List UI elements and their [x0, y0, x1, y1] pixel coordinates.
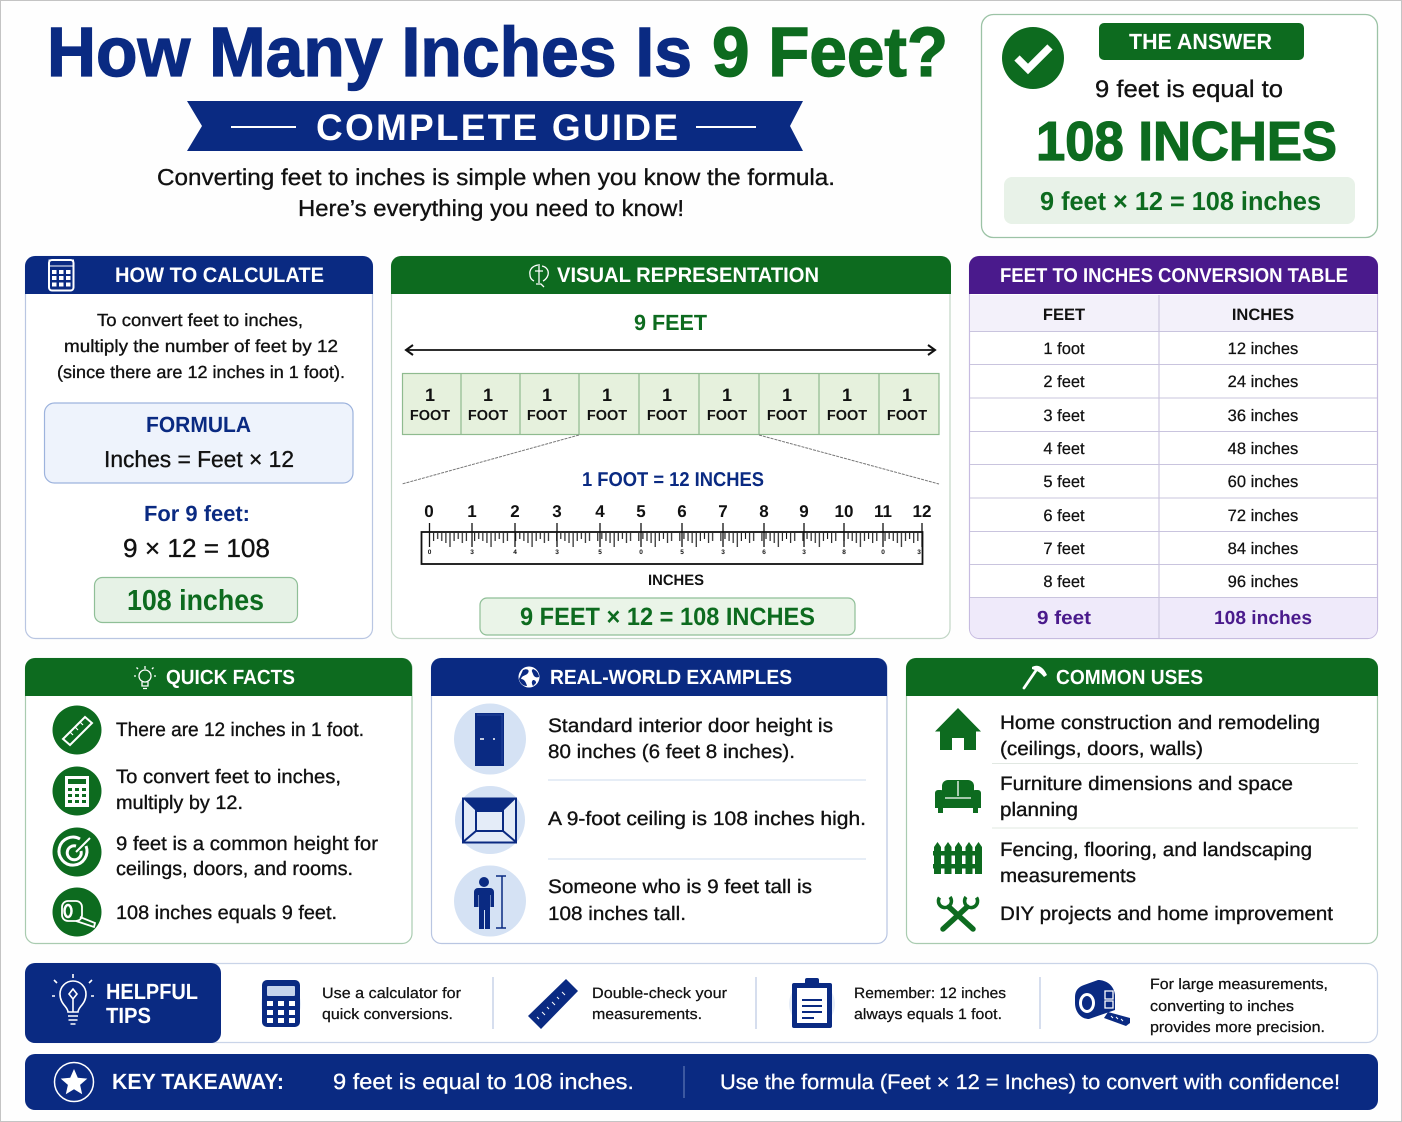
table column headings: INCHES [1232, 306, 1294, 324]
header: how to calculate [25, 256, 373, 294]
explanation text: (since there are 12 inches in 1 foot). [57, 362, 345, 382]
table rows: 8 feet [1043, 573, 1085, 591]
use: fencing: Fencing, flooring, and landscaping [1000, 839, 1312, 861]
fact: 108 inches: 108 inches equals 9 feet. [116, 902, 337, 924]
panel: common uses [906, 658, 1378, 944]
label: 1 foot = 12 inches: 1 FOOT = 12 INCHES [582, 469, 764, 491]
formula box: Inches = Feet × 12 [104, 446, 294, 472]
header: real-world examples: REAL-WORLD EXAMPLES [550, 666, 792, 689]
label: inches: INCHES [648, 572, 704, 589]
foot blocks: 1 [902, 385, 912, 405]
ruler: 0 [881, 549, 885, 556]
table rows: 7 feet [1043, 540, 1085, 558]
foot blocks: FOOT [468, 408, 508, 424]
icon: globe pin [530, 264, 548, 287]
ruler: 0 [428, 549, 432, 556]
header: conversion table [969, 256, 1378, 294]
header: quick facts [25, 658, 412, 696]
ruler: 3 [470, 549, 474, 556]
panel: the answer [982, 14, 1378, 238]
tip: calculator: Use a calculator for [322, 985, 461, 1002]
foot blocks: 1 [425, 385, 435, 405]
fact: 108 inches [52, 888, 337, 936]
table rows: 12 inches [1228, 340, 1298, 358]
tip: tape measure: For large measurements, [1150, 976, 1328, 993]
foot blocks: FOOT [827, 408, 867, 424]
result box [94, 578, 298, 622]
use: fencing [933, 839, 1312, 887]
fact: multiply by 12: To convert feet to inches, [116, 766, 341, 788]
example: door [454, 704, 833, 774]
ruler: 2 [510, 502, 520, 521]
highlighted row: 9 feet: 108 inches [1214, 608, 1312, 629]
banner: complete guide: COMPLETE GUIDE [316, 107, 678, 148]
foot blocks: FOOT [527, 408, 567, 424]
ruler: 5 [598, 549, 602, 556]
answer label [1099, 23, 1304, 60]
foot blocks: FOOT [587, 408, 627, 424]
worked example [123, 501, 270, 563]
table rows: 72 inches [1228, 507, 1298, 525]
ruler: 0 [424, 502, 434, 521]
foot blocks: 1 [842, 385, 852, 405]
icon: globe [518, 666, 540, 688]
ruler: 9 [799, 502, 809, 521]
ruler: 11 [874, 502, 892, 521]
foot blocks: FOOT [767, 408, 807, 424]
example: person: 108 inches tall. [548, 903, 686, 925]
answer lead-in: 9 feet is equal to [1095, 76, 1283, 103]
ruler: 4 [595, 502, 605, 521]
use: furniture: planning [1000, 799, 1078, 821]
table rows: 24 inches [1228, 373, 1298, 391]
fact: 12 inches in a foot [52, 706, 364, 754]
ruler: 5 [636, 502, 646, 521]
use: DIY tools: DIY projects and home improvement [1000, 903, 1334, 925]
fact: multiply by 12 [52, 766, 341, 816]
formula box: FORMULA [146, 412, 251, 437]
use: furniture: Furniture dimensions and space [1000, 773, 1293, 795]
table rows: 2 feet [1043, 373, 1085, 391]
icon: light bulb [134, 666, 156, 688]
tip: tape measure [1075, 976, 1328, 1036]
table rows: 4 feet [1043, 440, 1085, 458]
ruler: 8 [842, 549, 846, 556]
ruler: 12 [913, 502, 931, 521]
tip: ruler: Double-check your [592, 985, 727, 1002]
ruler: 3 [721, 549, 725, 556]
tip: clipboard: always equals 1 foot. [854, 1006, 1002, 1023]
explanation text [57, 310, 345, 382]
use: construction: Home construction and remodeling [1000, 712, 1320, 734]
use: furniture [935, 773, 1293, 821]
key takeaway bar [25, 1054, 1378, 1110]
tip: clipboard: Remember: 12 inches [854, 985, 1006, 1002]
ruler: 3 [917, 549, 921, 556]
worked example: 9 × 12 = 108 [123, 533, 270, 563]
tip: tape measure: converting to inches [1150, 998, 1294, 1015]
ruler: 8 [759, 502, 769, 521]
ruler: 6 [762, 549, 766, 556]
tip: ruler: measurements. [592, 1006, 702, 1023]
table rows: 36 inches [1228, 407, 1298, 425]
intro text: Here’s everything you need to know! [298, 195, 684, 221]
highlighted row: 9 feet: 9 feet [1037, 608, 1092, 629]
ruler: 1 [467, 502, 477, 521]
table rows: 84 inches [1228, 540, 1298, 558]
table rows: 1 foot [1043, 340, 1085, 358]
highlighted row: 9 feet [970, 598, 1377, 638]
intro text: Converting feet to inches is simple when you know the formula. [157, 164, 835, 190]
fact: 12 inches in a foot: There are 12 inches in 1 foot. [116, 719, 364, 741]
ruler: 6 [677, 502, 687, 521]
example: person [454, 866, 812, 936]
header: quick facts: QUICK FACTS [166, 666, 295, 689]
banner: complete guide [187, 101, 803, 151]
label: 9 feet: 9 FEET [634, 310, 708, 335]
result box: 9 FEET × 12 = 108 INCHES [520, 603, 815, 631]
ruler: 3 [552, 502, 562, 521]
tip: ruler [528, 979, 727, 1029]
icon: check mark [1002, 27, 1064, 89]
table column headings: FEET [1043, 306, 1085, 324]
table rows: 5 feet [1043, 473, 1085, 491]
title: 9 Feet? [712, 13, 948, 91]
use: fencing: measurements [1000, 865, 1136, 887]
icon: calculator [49, 260, 74, 290]
fact: common height [52, 828, 379, 880]
arrow: nine feet span [406, 345, 935, 355]
tip: calculator [261, 980, 461, 1027]
table rows: 60 inches [1228, 473, 1298, 491]
example: door: 80 inches (6 feet 8 inches). [548, 741, 795, 763]
panel: real-world examples [431, 658, 887, 944]
ruler: 3 [555, 549, 559, 556]
panel: visual representation [391, 256, 951, 638]
header: conversion table: FEET TO INCHES CONVERSION TABLE [1000, 265, 1348, 287]
title: How Many Inches Is [47, 13, 692, 91]
header: common uses: COMMON USES [1056, 666, 1203, 689]
key takeaway bar: 9 feet is equal to 108 inches. [333, 1069, 634, 1094]
tip: calculator: quick conversions. [322, 1006, 453, 1023]
helpful tips label: HELPFUL [106, 979, 198, 1004]
panel: quick facts [25, 658, 412, 944]
ruler: 10 [835, 502, 853, 521]
panel: helpful tips [25, 963, 1378, 1043]
foot blocks: FOOT [707, 408, 747, 424]
foot blocks: 1 [602, 385, 612, 405]
icon: hammer [1024, 666, 1047, 688]
table rows: 3 feet [1043, 407, 1085, 425]
ruler: 5 [680, 549, 684, 556]
foot blocks: 1 [483, 385, 493, 405]
intro text [157, 164, 835, 221]
tip: tape measure: provides more precision. [1150, 1019, 1325, 1036]
example: ceiling [455, 786, 866, 854]
ruler: 7 [718, 502, 728, 521]
foot blocks: 1 [782, 385, 792, 405]
answer label: THE ANSWER [1129, 29, 1272, 54]
ruler: 4 [513, 549, 517, 556]
use: construction [935, 708, 1320, 760]
formula box [44, 403, 353, 483]
header: visual representation: VISUAL REPRESENTATION [557, 264, 819, 287]
header: real-world examples [431, 658, 887, 696]
ruler [422, 502, 931, 564]
example: ceiling: A 9-foot ceiling is 108 inches high. [548, 808, 866, 830]
use: construction: (ceilings, doors, walls) [1000, 738, 1203, 760]
ruler: 0 [639, 549, 643, 556]
answer equation: 9 feet × 12 = 108 inches [1040, 186, 1321, 216]
example: person: Someone who is 9 feet tall is [548, 876, 812, 898]
panel: conversion table [969, 256, 1378, 638]
tip: clipboard [789, 978, 1006, 1028]
table rows: 6 feet [1043, 507, 1085, 525]
result box: 108 inches [127, 585, 264, 617]
key takeaway bar: Use the formula (Feet × 12 = Inches) to convert with confidence! [720, 1071, 1340, 1094]
panel: how to calculate [25, 256, 373, 638]
answer value: 108 INCHES [1036, 110, 1337, 172]
helpful tips label: TIPS [106, 1003, 151, 1028]
zoom guide lines [402, 435, 939, 484]
header: visual representation [391, 256, 951, 294]
foot blocks: FOOT [647, 408, 687, 424]
icon: star [54, 1062, 94, 1102]
use: DIY tools [938, 897, 1334, 929]
helpful tips label [25, 963, 221, 1043]
answer equation [1004, 177, 1355, 224]
foot blocks [402, 374, 939, 434]
table rows: 96 inches [1228, 573, 1298, 591]
header: how to calculate: HOW TO CALCULATE [115, 264, 324, 287]
foot blocks: FOOT [887, 408, 927, 424]
icon: tip bulb [52, 974, 94, 1024]
example: door: Standard interior door height is [548, 715, 833, 737]
table rows: 48 inches [1228, 440, 1298, 458]
table column headings [970, 295, 1377, 331]
result box [480, 598, 855, 635]
fact: multiply by 12: multiply by 12. [116, 792, 243, 814]
ruler: 3 [802, 549, 806, 556]
fact: common height: ceilings, doors, and rooms. [116, 858, 353, 880]
foot blocks: 1 [662, 385, 672, 405]
fact: common height: 9 feet is a common height for [116, 833, 379, 855]
explanation text: To convert feet to inches, [97, 310, 303, 330]
worked example: For 9 feet: [144, 501, 250, 526]
table rows [1043, 340, 1298, 591]
header: common uses [906, 658, 1378, 696]
explanation text: multiply the number of feet by 12 [64, 336, 338, 356]
foot blocks: 1 [542, 385, 552, 405]
key takeaway bar: KEY TAKEAWAY: [112, 1069, 284, 1094]
foot blocks: FOOT [410, 408, 450, 424]
foot blocks: 1 [722, 385, 732, 405]
